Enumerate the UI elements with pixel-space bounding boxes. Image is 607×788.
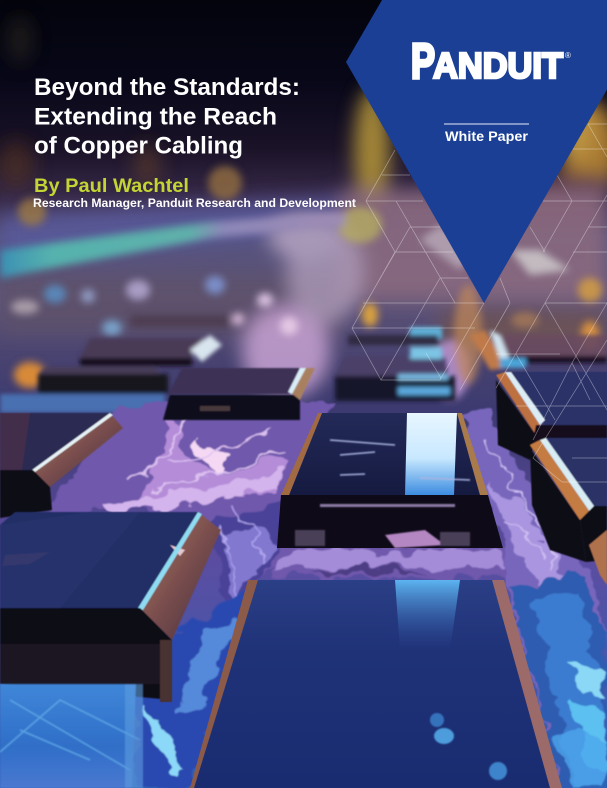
white paper label: White Paper bbox=[445, 129, 529, 144]
liquid coolant bbox=[40, 402, 607, 788]
hexagonal line pattern bbox=[352, 124, 607, 482]
Panduit logo: P bbox=[411, 35, 435, 89]
blurred far chip row bbox=[0, 327, 607, 413]
title bbox=[34, 74, 300, 160]
Panduit logo: ANDUIT bbox=[433, 45, 563, 86]
title: Beyond the Standards: bbox=[34, 74, 300, 101]
chip: bottom-left blue bbox=[0, 684, 143, 788]
blue diamond panel bbox=[346, 0, 607, 303]
title: Extending the Reach bbox=[34, 104, 277, 130]
author role: Research Manager, Panduit Research and Development bbox=[33, 198, 356, 210]
divider rule bbox=[444, 124, 529, 125]
author name: By Paul Wachtel bbox=[34, 176, 189, 197]
chip: top-left bbox=[0, 413, 123, 518]
chip: front centre bbox=[190, 580, 562, 788]
title: of Copper Cabling bbox=[34, 132, 243, 160]
chip: upper centre bbox=[163, 368, 315, 420]
Panduit logo: ® bbox=[565, 51, 571, 60]
Panduit logo bbox=[411, 35, 571, 89]
chips: right bbox=[496, 372, 607, 585]
chip: left bbox=[0, 512, 221, 702]
chip: centre bbox=[277, 413, 503, 548]
